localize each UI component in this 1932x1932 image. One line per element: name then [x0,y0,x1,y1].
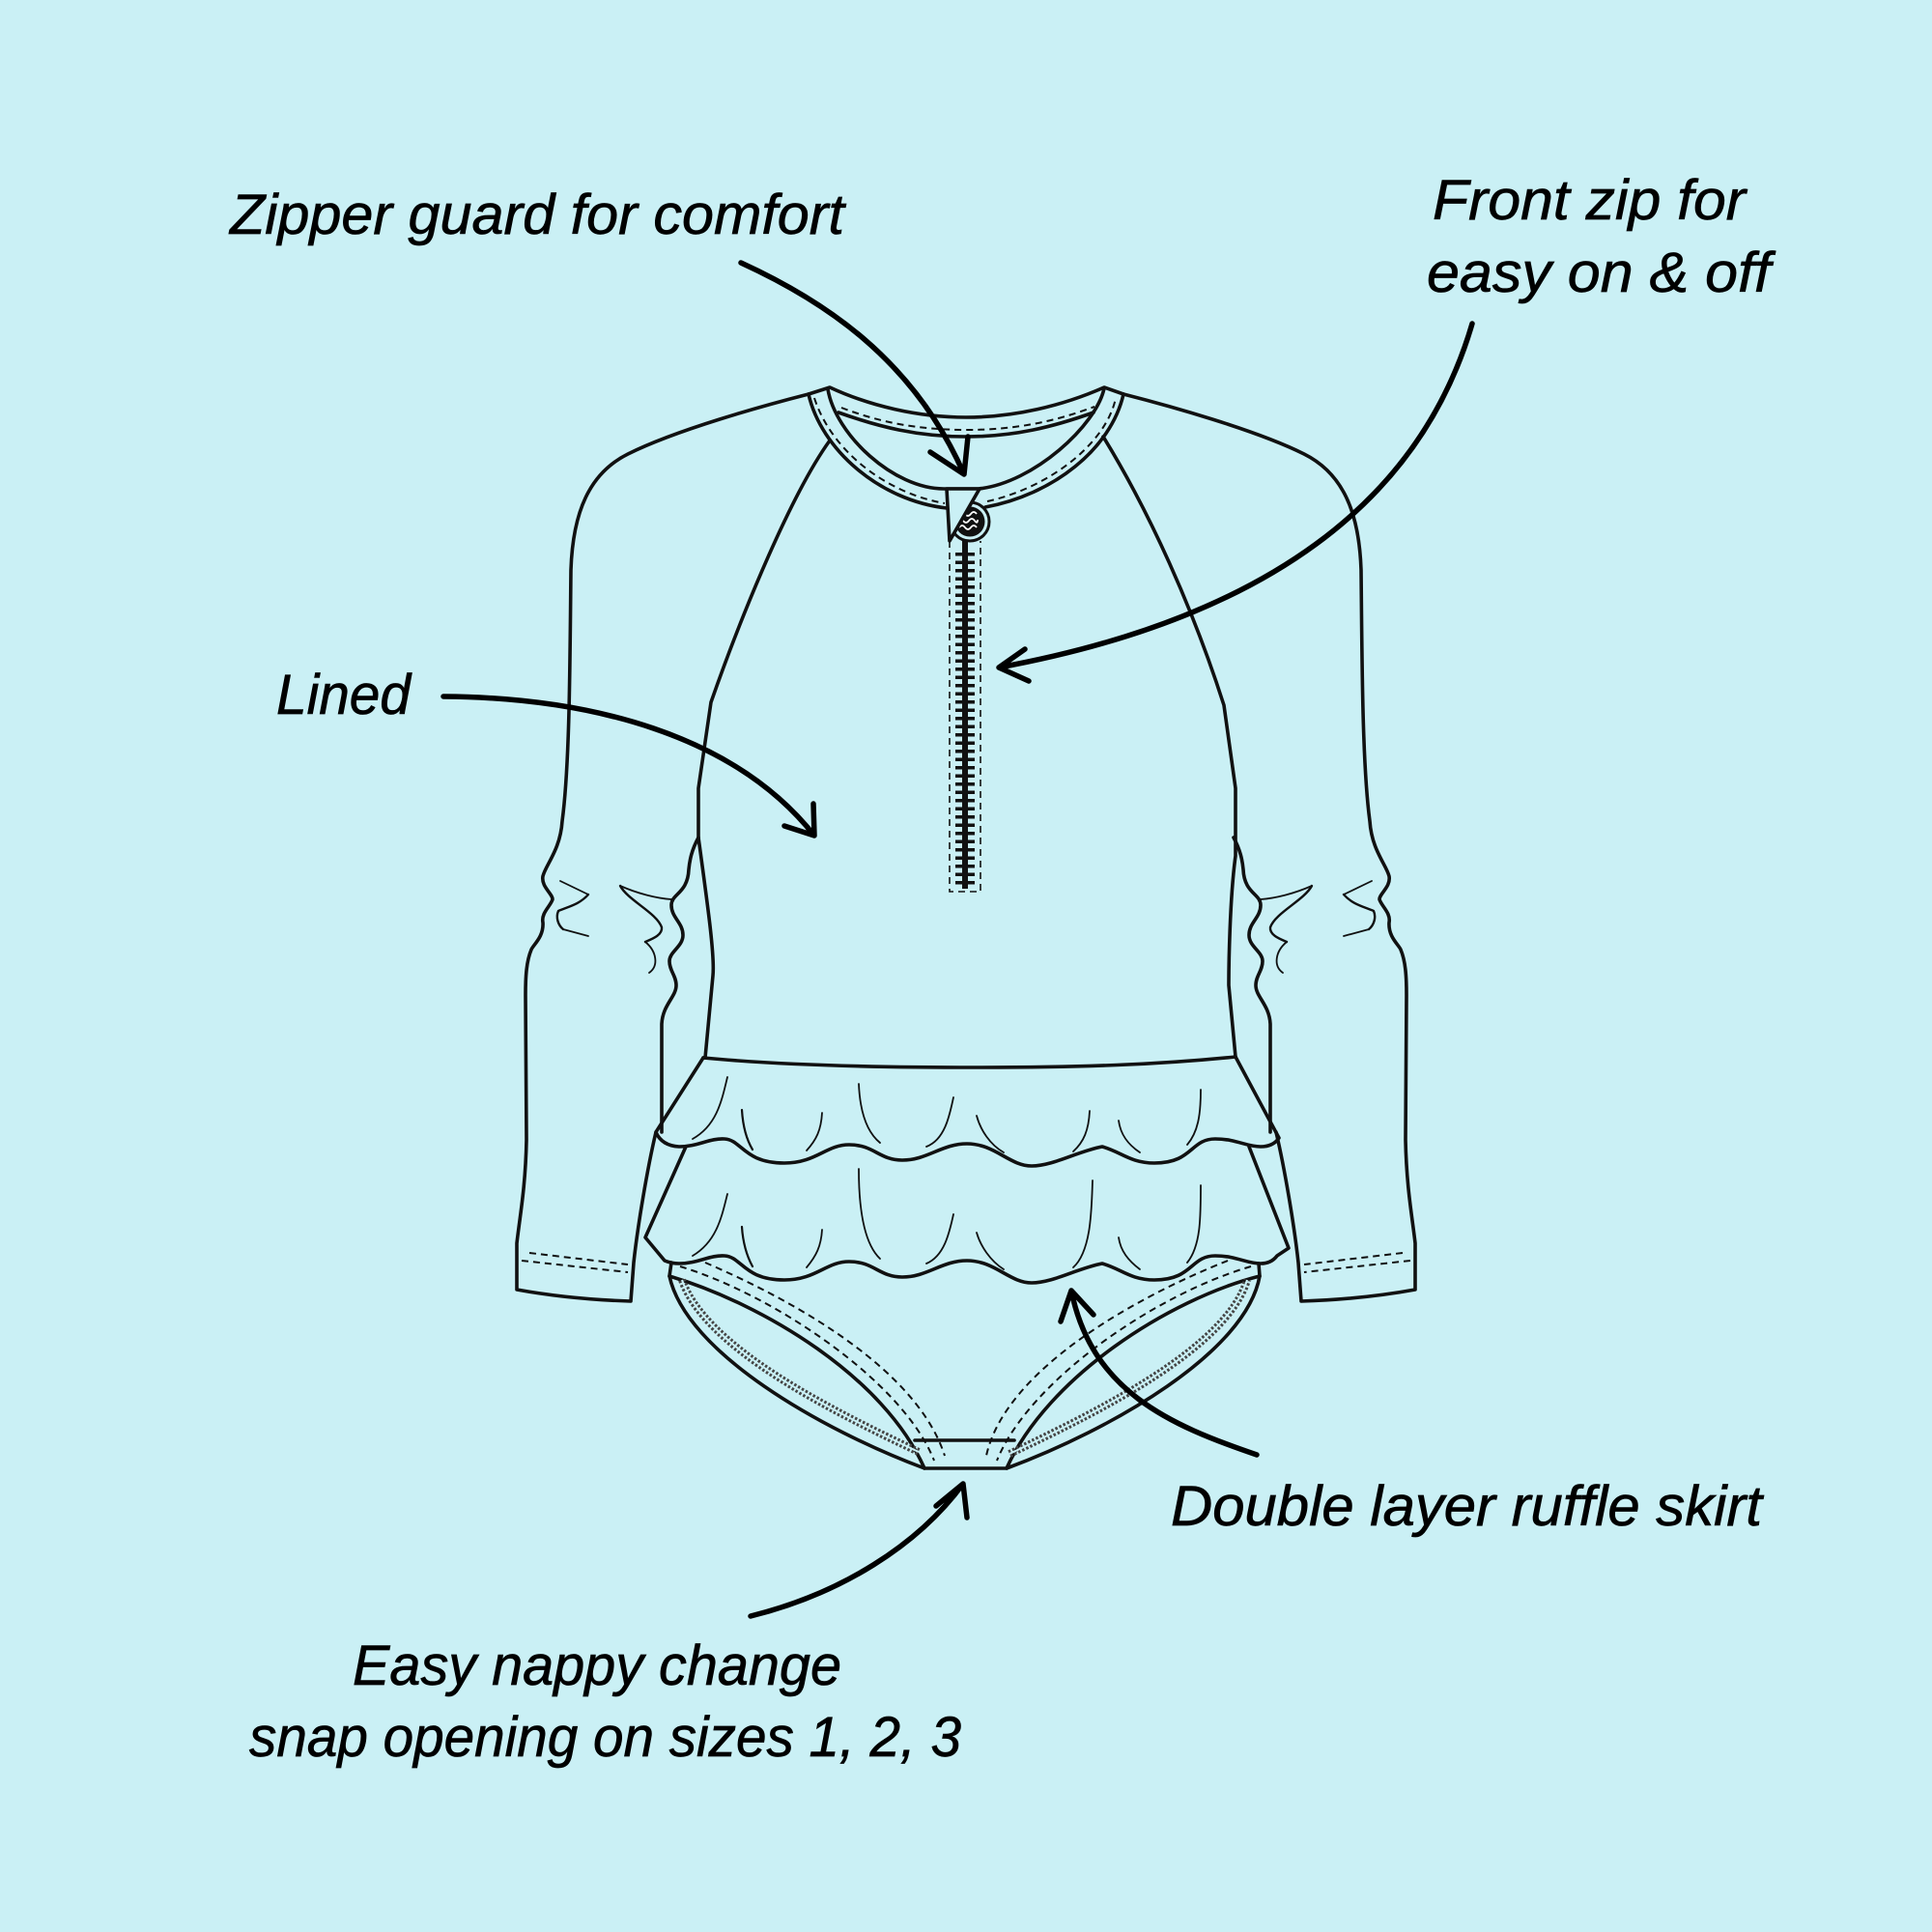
left sleeve [517,394,809,1301]
callout: ruffle skirt [1061,1291,1765,1538]
label: easy nappy change snap opening: Easy nappy change [353,1634,841,1697]
ruffle tier two [645,1147,1289,1283]
label: front zip for easy on and off: Front zip for [1433,169,1748,232]
zipper [950,539,980,892]
arrow: to zipper [999,324,1472,681]
zipper guard [947,489,980,541]
label: zipper guard for comfort: Zipper guard for comfort [228,184,847,246]
callout: front zip [999,169,1776,681]
ruffle tier one [656,1057,1279,1166]
label: front zip for easy on and off: easy on & off [1427,242,1776,304]
arrow: to gusset [751,1484,967,1616]
callout: nappy change [249,1484,967,1769]
callout: zipper guard [228,184,968,474]
collar [809,387,1123,508]
arrow: to ruffle [1061,1291,1257,1455]
arrow: to zipper guard [741,263,968,474]
label: lined: Lined [276,664,412,726]
garment: long sleeve ruffle swimsuit [517,387,1415,1468]
label: double layer ruffle skirt: Double layer ruffle skirt [1171,1475,1765,1538]
callout: lined [276,664,814,836]
right sleeve [1123,394,1415,1301]
arrow: to bodice [443,696,814,836]
label: easy nappy change snap opening: snap opening on sizes 1, 2, 3 [249,1706,961,1769]
briefs with snap gusset [669,1261,1260,1468]
bodice [698,437,1236,1058]
icon: zip pull with wave logo [951,502,989,541]
